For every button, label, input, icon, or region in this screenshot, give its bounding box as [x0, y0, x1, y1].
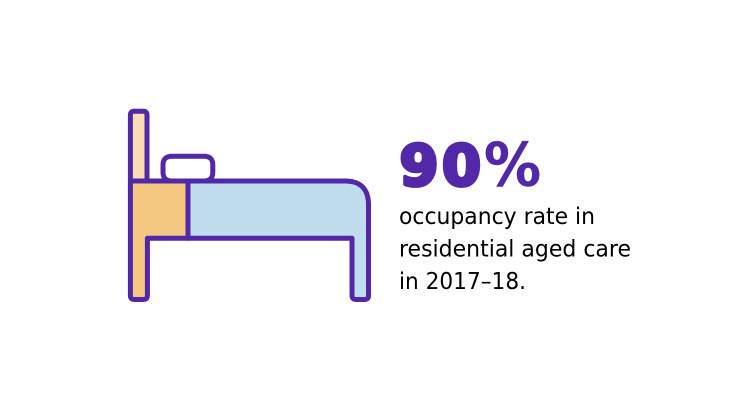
line 1: occupancy rate in — [399, 204, 595, 230]
text block: description — [399, 204, 631, 295]
heading: 90% — [400, 130, 541, 200]
headboard post — [130, 111, 147, 181]
mattress and right leg — [188, 181, 368, 300]
line 3: in 2017–18. — [399, 269, 526, 295]
headboard panel and left leg — [130, 181, 188, 300]
line 2: residential aged care — [399, 236, 631, 262]
icon: bed — [130, 111, 368, 300]
percent sign: % — [484, 130, 541, 200]
digits: 90 — [400, 134, 484, 199]
pillow — [163, 156, 213, 181]
